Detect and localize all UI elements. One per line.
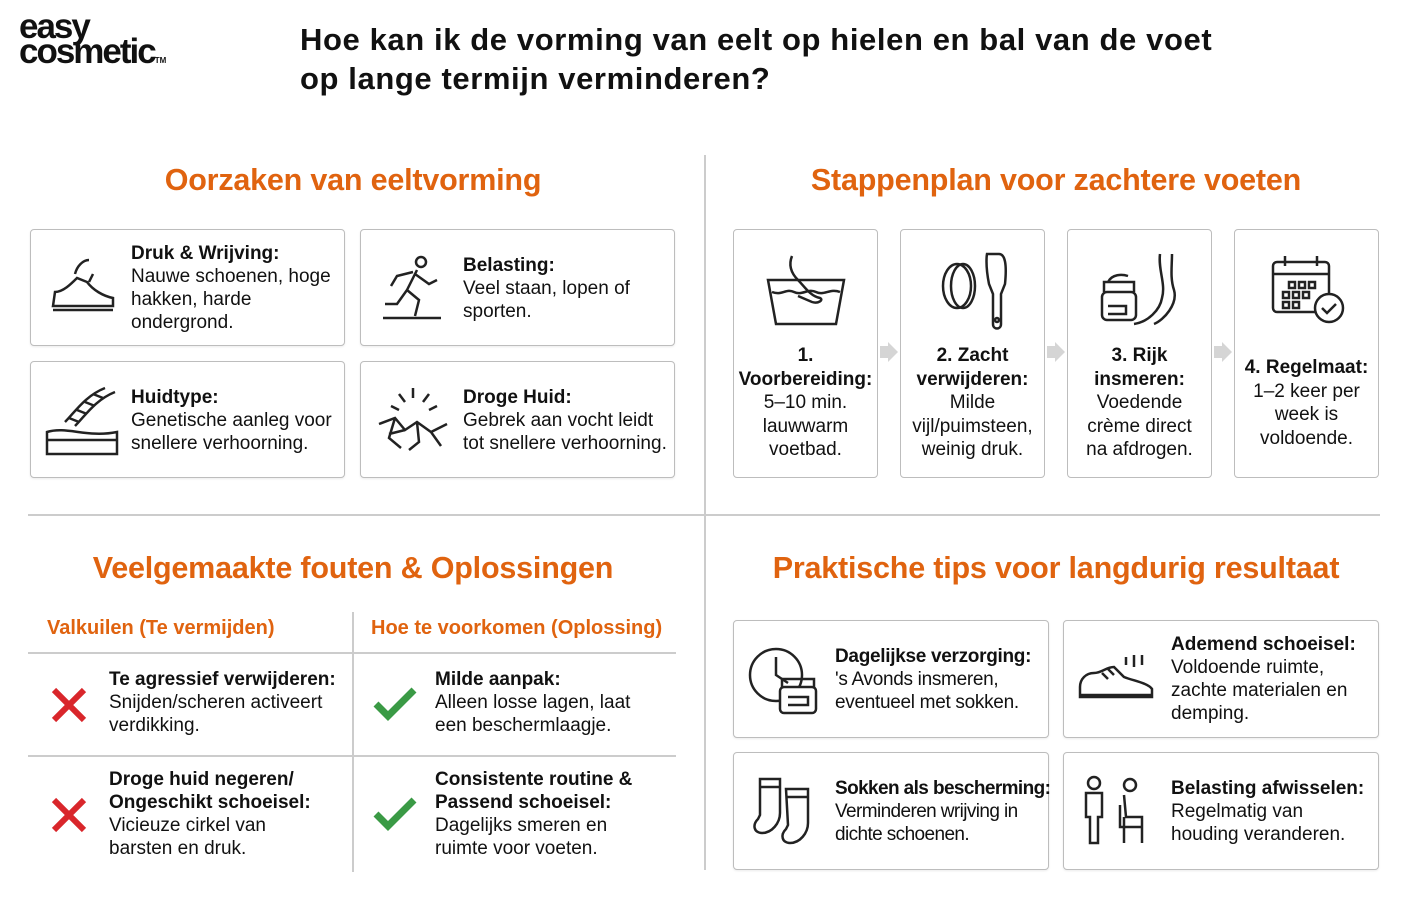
step 4 <box>1234 229 1379 478</box>
arrow <box>880 342 898 362</box>
step 3: insmeren: <box>1094 368 1185 390</box>
step 1: 5–10 min. <box>764 392 847 413</box>
tip: daily care: eventueel met sokken. <box>835 692 1019 713</box>
row 2 solution: Consistente routine & <box>435 769 632 790</box>
card: droge huid: Droge Huid: <box>463 387 572 408</box>
card: droge huid <box>360 361 675 478</box>
icon: foot bath <box>766 256 846 326</box>
arrow <box>1214 342 1232 362</box>
card: druk: hakken, harde <box>131 289 251 310</box>
icon: check <box>374 798 416 831</box>
step 3: na afdrogen. <box>1086 439 1193 460</box>
step 4: voldoende. <box>1260 428 1353 448</box>
icon: dna skin <box>46 386 118 456</box>
row 1 solution <box>374 669 630 736</box>
icon: shoe <box>52 258 114 312</box>
tip: alternate <box>1063 752 1379 870</box>
step 4: week is <box>1275 404 1338 425</box>
icon: cross <box>52 688 86 722</box>
row 1 solution: Milde aanpak: <box>435 669 561 690</box>
step 2: verwijderen: <box>917 368 1028 390</box>
tip: socks: Sokken als bescherming: <box>835 778 1050 799</box>
panel: steps <box>733 163 1379 478</box>
card: droge huid: Gebrek aan vocht leidt <box>463 410 653 431</box>
icon: cross <box>52 798 86 832</box>
panel: mistakes <box>28 551 676 872</box>
icon: clock and jar <box>748 648 818 714</box>
arrow <box>1047 342 1065 362</box>
heading: mistakes: Veelgemaakte fouten & Oplossingen <box>93 551 613 585</box>
step 1 <box>733 229 878 478</box>
icon: cream and foot <box>1100 254 1176 326</box>
logo: easy <box>19 7 89 46</box>
row 1 pitfall <box>52 669 336 736</box>
panel: tips <box>733 551 1379 871</box>
heading: causes: Oorzaken van eeltvorming <box>165 163 541 197</box>
row 1 pitfall: Te agressief verwijderen: <box>109 669 336 690</box>
tip: daily care: Dagelijkse verzorging: <box>835 646 1031 667</box>
heading: tips: Praktische tips voor langdurig resultaat <box>773 551 1339 585</box>
card: huidtype <box>30 361 345 478</box>
tip: socks: Verminderen wrijving in <box>835 801 1018 822</box>
card: druk: Nauwe schoenen, hoge <box>131 266 331 287</box>
icon: check <box>374 688 416 721</box>
step 4: 4. Regelmaat: <box>1245 357 1368 378</box>
tip: alternate: Belasting afwisselen: <box>1171 778 1364 799</box>
card: droge huid: tot snellere verhoorning. <box>463 433 667 454</box>
heading: steps: Stappenplan voor zachtere voeten <box>811 163 1301 197</box>
step 3: 3. Rijk <box>1112 345 1167 366</box>
icon: socks <box>753 778 810 844</box>
card: druk: Druk & Wrijving: <box>131 243 280 264</box>
row 2 solution: Passend schoeisel: <box>435 792 611 813</box>
step 2: Milde <box>950 392 995 413</box>
tip: alternate: houding veranderen. <box>1171 824 1345 845</box>
icon: pumice and file <box>942 252 1007 330</box>
step 2: 2. Zacht <box>937 345 1008 366</box>
row 2 pitfall: Ongeschikt schoeisel: <box>109 792 311 813</box>
step 3: crème direct <box>1087 416 1192 436</box>
row 1 pitfall: Snijden/scheren activeert <box>109 692 322 713</box>
card: belasting <box>360 229 675 346</box>
row 2 pitfall <box>52 769 311 859</box>
step 4: 1–2 keer per <box>1253 380 1360 402</box>
title <box>300 22 1212 96</box>
step 3 <box>1067 229 1212 478</box>
card: belasting: sporten. <box>463 301 532 322</box>
row 2 pitfall: Vicieuze cirkel van <box>109 815 266 836</box>
tip: alternate: Regelmatig van <box>1171 801 1303 822</box>
icon: cracked skin <box>378 388 448 451</box>
icon: sneaker <box>1078 655 1154 698</box>
tip: socks: dichte schoenen. <box>835 824 969 845</box>
card: belasting: Belasting: <box>463 255 555 276</box>
step 2: vijl/puimsteen, <box>912 416 1033 436</box>
tip: shoes <box>1063 620 1379 738</box>
tip: shoes: demping. <box>1171 703 1249 724</box>
row 2 solution <box>374 769 632 859</box>
card: huidtype: snellere verhoorning. <box>131 433 308 454</box>
icon: calendar check <box>1272 256 1344 324</box>
tip: daily care <box>733 620 1049 738</box>
step 1: lauwwarm <box>763 416 848 436</box>
icon: runner <box>383 256 441 320</box>
tip: shoes: zachte materialen en <box>1171 680 1347 701</box>
row 2 solution: ruimte voor voeten. <box>435 838 598 859</box>
row 1 pitfall: verdikking. <box>109 715 200 736</box>
card: belasting: Veel staan, lopen of <box>463 278 630 299</box>
logo <box>19 7 166 71</box>
logo: cosmeticTM <box>19 32 166 71</box>
card: druk: ondergrond. <box>131 312 233 333</box>
card: huidtype: Genetische aanleg voor <box>131 410 332 431</box>
tip: socks <box>733 752 1049 870</box>
icon: standing and sitting <box>1084 776 1144 844</box>
row 2 pitfall: barsten en druk. <box>109 838 246 859</box>
step 1: voetbad. <box>769 439 842 460</box>
step 2: weinig druk. <box>922 439 1023 460</box>
row 2 pitfall: Droge huid negeren/ <box>109 769 294 790</box>
title: Hoe kan ik de vorming van eelt op hielen en bal van de voet <box>300 22 1212 57</box>
card: huidtype: Huidtype: <box>131 387 219 408</box>
step 2 <box>900 229 1045 478</box>
row 1 solution: een beschermlaagje. <box>435 715 611 736</box>
tip: daily care: 's Avonds insmeren, <box>835 669 998 690</box>
row 2 solution: Dagelijks smeren en <box>435 815 607 836</box>
step 1: Voorbereiding: <box>739 368 872 390</box>
tip: shoes: Ademend schoeisel: <box>1171 634 1356 655</box>
panel: causes <box>30 163 675 479</box>
title: op lange termijn verminderen? <box>300 61 770 96</box>
subheading: solutions: Hoe te voorkomen (Oplossing) <box>371 617 662 639</box>
subheading: pitfalls: Valkuilen (Te vermijden) <box>47 617 274 639</box>
card: druk <box>30 229 345 346</box>
step 1: 1. <box>798 345 813 366</box>
row 1 solution: Alleen losse lagen, laat <box>435 692 630 713</box>
step 3: Voedende <box>1097 392 1182 413</box>
tip: shoes: Voldoende ruimte, <box>1171 657 1324 678</box>
